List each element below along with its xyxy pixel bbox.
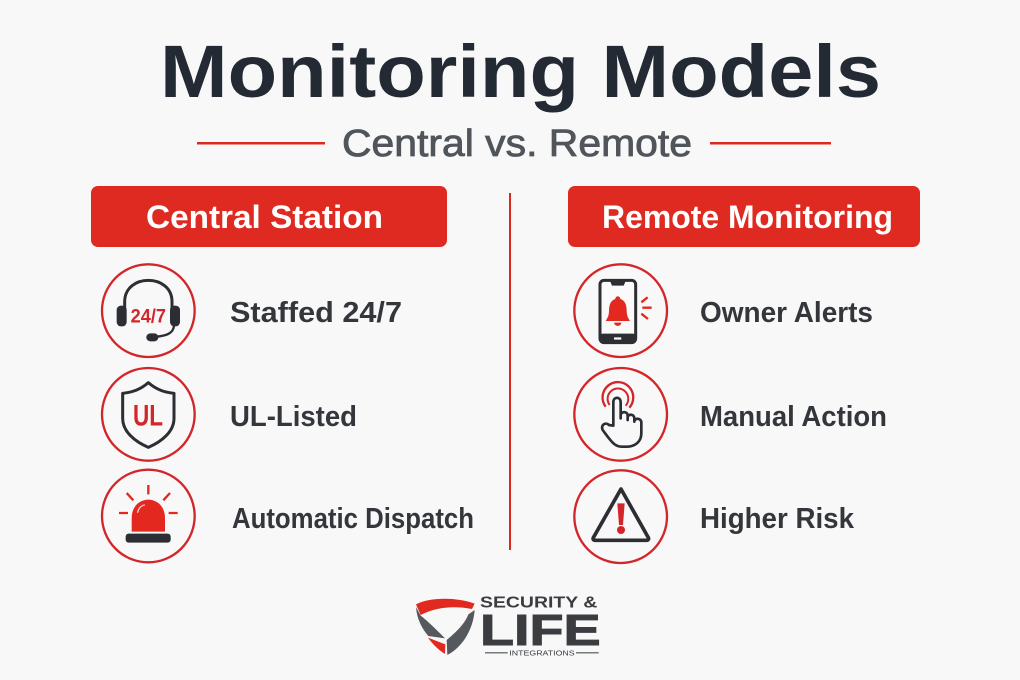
logo text: LIFE	[480, 606, 601, 655]
panel: central station	[91, 186, 474, 562]
item: automatic dispatch: Automatic Dispatch	[232, 503, 474, 535]
item: staffed 24/7: Staffed 24/7	[230, 297, 402, 329]
item: staffed 24/7	[102, 264, 402, 357]
logo shield	[416, 599, 475, 655]
item: UL-listed	[102, 368, 357, 461]
icon: UL shield	[102, 368, 195, 461]
icon: warning triangle	[574, 470, 667, 563]
icon: tapping hand	[574, 368, 667, 461]
icon: headset 24/7: 24/7	[131, 306, 166, 327]
heading: central station	[91, 186, 447, 247]
item: owner alerts	[574, 264, 873, 357]
logo text: SECURITY &	[480, 595, 597, 612]
logo text	[480, 595, 601, 658]
title: Monitoring Models	[160, 30, 881, 113]
icon: siren	[102, 470, 195, 562]
icon: headset 24/7	[102, 264, 195, 357]
subtitle with side rules: Central vs. Remote	[342, 123, 692, 165]
heading: remote monitoring	[568, 186, 920, 247]
icon: phone bell	[574, 264, 667, 357]
icon: UL shield: UL	[133, 399, 163, 432]
heading: central station: Central Station	[146, 199, 383, 235]
divider	[509, 193, 511, 550]
item: manual action	[574, 368, 887, 461]
panel: remote monitoring	[568, 186, 920, 563]
item: automatic dispatch	[102, 470, 474, 562]
item: higher risk: Higher Risk	[700, 503, 855, 535]
item: UL-listed: UL-Listed	[230, 401, 357, 433]
logo: Security & Life Integrations	[416, 595, 601, 658]
logo text: INTEGRATIONS	[509, 649, 575, 658]
item: higher risk	[574, 470, 855, 563]
heading: remote monitoring: Remote Monitoring	[602, 199, 893, 235]
item: owner alerts: Owner Alerts	[700, 297, 873, 329]
item: manual action: Manual Action	[700, 401, 887, 433]
